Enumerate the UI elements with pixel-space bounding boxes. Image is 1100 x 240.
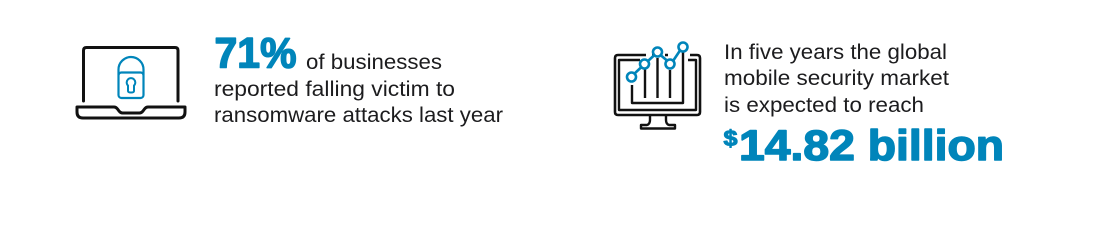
text: market description	[724, 41, 949, 117]
stat: $14.82 billion: $	[724, 126, 738, 151]
text: ransomware description	[214, 51, 503, 127]
panel: mobile security market statistic	[615, 41, 1004, 170]
text: market description: is expected to reach	[724, 94, 924, 117]
text: ransomware description: ransomware attacks last year	[214, 104, 503, 127]
icon: laptop with padlock	[77, 48, 185, 118]
stat: $14.82 billion: 14.82 billion	[739, 122, 1004, 170]
text: market description: In five years the global	[724, 41, 947, 64]
icon: monitor with line chart	[615, 42, 700, 128]
text: market description: mobile security market	[724, 67, 949, 90]
text: ransomware description: of businesses	[306, 51, 442, 74]
text: ransomware description: reported falling victim to	[214, 78, 455, 101]
stat: 71%: 71%	[214, 30, 296, 78]
panel: ransomware statistic	[77, 30, 503, 127]
